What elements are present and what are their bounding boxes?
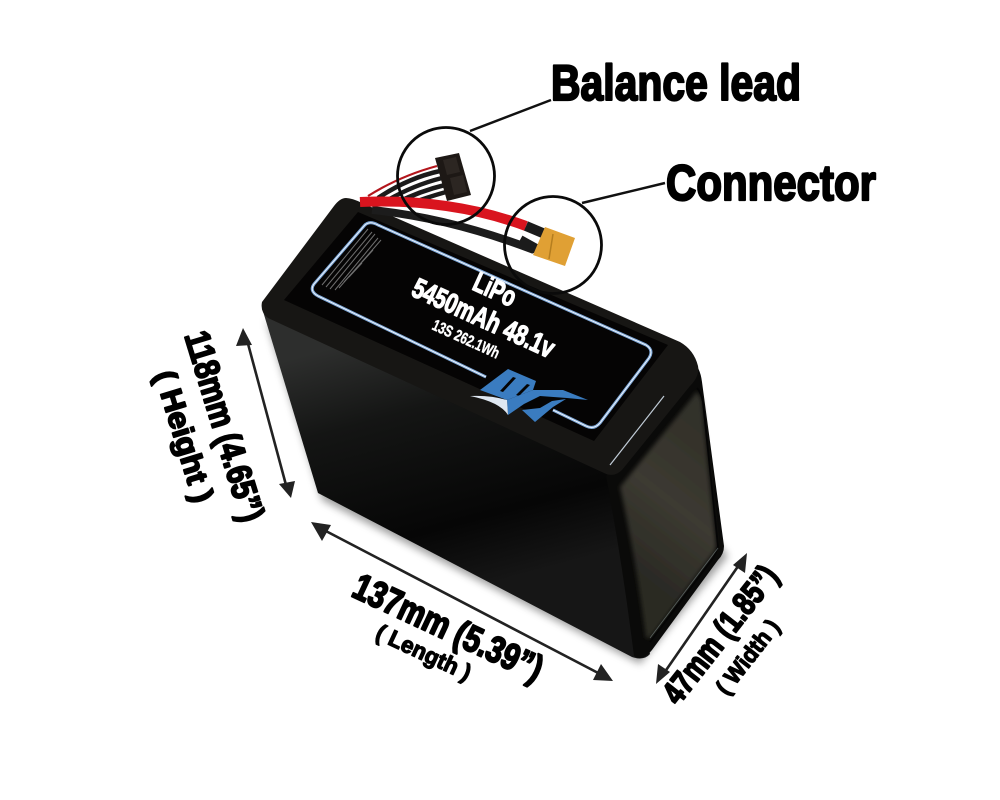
icon: brand logo [470,369,588,422]
dimension: length value: 137mm (5.39”) [347,566,550,689]
side highlight [610,396,664,465]
dimension: height caption: ( Height ) [148,367,219,506]
callout circle: connector [504,196,602,294]
arrow: width [656,553,747,684]
dimension: height value: 118mm (4.65”) [177,326,272,526]
battery front face [262,308,650,658]
callout circle: balance lead [398,128,494,224]
leader line: balance lead [470,100,551,131]
leader line: connector [582,183,665,203]
xt connector [533,227,575,266]
label text: cell count and energy: 13S 262.1Wh [429,317,502,362]
arrow: length [311,522,613,681]
heading: Balance lead: Balance lead [551,55,801,111]
dimension: width value: 47mm (1.85”) [654,558,785,711]
dimension: length caption: ( Length ) [372,619,476,686]
battery side face [606,362,724,658]
main power wires and XT connector [360,202,575,266]
label text: capacity and voltage: 5450mAh 48.1v [408,272,560,364]
dimension: width caption: ( Width ) [710,614,785,699]
balance lead wires and plug [368,153,471,205]
battery top face [262,198,698,475]
battery pack [262,198,728,664]
arrow: height [236,328,295,498]
heading: Connector: Connector [666,155,876,211]
label border [312,223,651,427]
fine print [322,229,381,290]
drop shadow [266,320,728,664]
label text: LiPo: LiPo [469,266,521,313]
balance connector [435,153,471,201]
